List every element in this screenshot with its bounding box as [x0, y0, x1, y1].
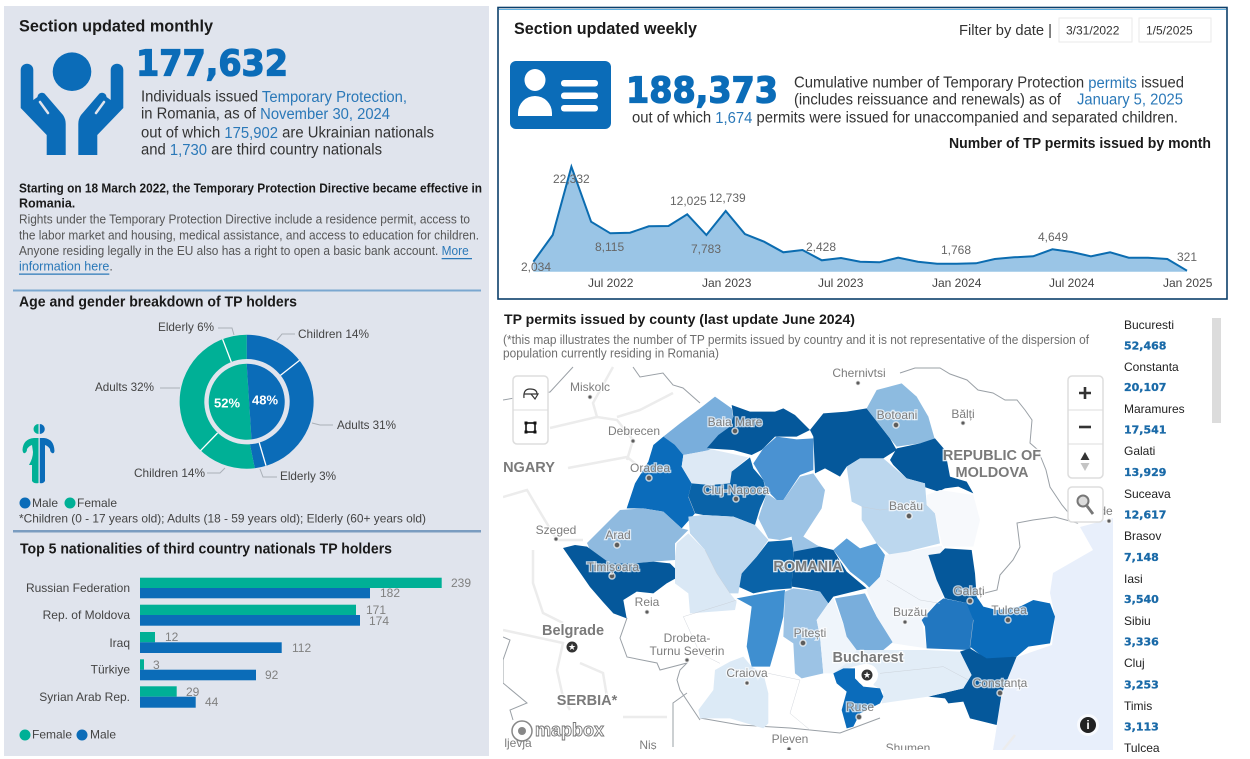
map place labels: Debrecen — [608, 424, 660, 438]
text block: cumulative permits: Cumulative number of Temporary Protection permits issued — [794, 74, 1184, 92]
map place labels: Tulcea — [991, 603, 1027, 617]
map place labels: Chernivtsi — [832, 366, 886, 380]
map place labels: Shumen — [886, 741, 930, 755]
county: Botosani — [867, 383, 935, 447]
chart x axis: Jul 2023 — [818, 276, 864, 290]
county ranking list: Bucuresti — [1124, 318, 1174, 332]
chart x axis: Jul 2024 — [1049, 276, 1095, 290]
map place labels: Pitești — [794, 626, 826, 640]
capital markers: ★ — [863, 670, 871, 680]
donut labels: Children 14% — [134, 466, 205, 480]
county ranking list: 3,336 — [1124, 636, 1159, 648]
row: Rep. of Moldova: 171 — [366, 603, 386, 617]
map place labels: Bucharest — [833, 650, 904, 666]
chart title: permits by month: Number of TP permits issued by month — [949, 135, 1211, 152]
heading: permits by county: TP permits issued by county (last update June 2024) — [504, 311, 855, 327]
chart value labels: 12,025 — [670, 194, 707, 208]
sea — [993, 518, 1113, 750]
text block: directive bold intro: Starting on 18 March 2022, the Temporary Protection Directive became effective in — [19, 182, 482, 196]
county: Ilfov and Giurgiu — [833, 668, 883, 728]
county ranking list — [1124, 318, 1185, 755]
map controls: search — [1068, 487, 1103, 522]
panel: monthly section — [4, 6, 489, 756]
text block: individuals issued temporary protection: out of which 175,902 are Ukrainian nationals — [141, 124, 434, 142]
counties — [563, 383, 1055, 730]
county: Dambovita — [817, 598, 857, 673]
legend: male and female: Male — [32, 496, 58, 510]
map place labels: REPUBLIC OF — [943, 448, 1041, 464]
map place labels: Arad — [605, 528, 631, 542]
heading: section updated weekly: Section updated weekly — [514, 19, 698, 38]
map place labels: Ruse — [846, 700, 874, 714]
row: Syrian Arab Rep. — [39, 685, 219, 709]
county: Alba — [688, 515, 768, 593]
text block: rights under the directive: the labor market and housing, medical assistance, and access to education for children. — [19, 228, 479, 242]
date filter: 3/31/2022 — [1066, 24, 1120, 38]
row: Rep. of Moldova: 174 — [369, 614, 389, 628]
chart value labels: 8,115 — [595, 240, 624, 254]
donut labels — [95, 320, 396, 483]
heading: section updated monthly: Section updated monthly — [19, 16, 214, 36]
county: Salaj — [682, 449, 748, 485]
map note: (*this map illustrates the number of TP permits issued by country and it is not representative of the dispersion of — [503, 333, 1089, 347]
row: Türkiye: Türkiye — [91, 662, 130, 676]
chart value labels — [521, 172, 1197, 274]
county: Galati — [928, 548, 977, 603]
county: Arad — [587, 508, 688, 563]
heading: age and gender breakdown: Age and gender breakdown of TP holders — [19, 294, 297, 310]
map place labels: Niș — [639, 738, 657, 752]
map note — [503, 333, 1089, 360]
county: Brasov — [792, 547, 867, 603]
capital markers: ★ — [568, 642, 576, 652]
county ranking list: 3,253 — [1124, 678, 1159, 692]
county: Bistrita — [753, 437, 813, 500]
text block: cumulative permits: out of which 1,674 permits were issued for unaccompanied and separated children. — [632, 110, 1178, 126]
value: 52 percent: 52% — [214, 396, 240, 410]
map place labels: ljevja — [504, 736, 532, 750]
county ranking list: 3,540 — [1124, 593, 1159, 606]
donut outer female segment — [180, 335, 255, 469]
map place labels: Reia — [635, 595, 660, 609]
icon: hands holding person — [21, 52, 123, 155]
chart x axis: Jan 2024 — [932, 276, 982, 290]
legend: female and male: Female — [32, 728, 72, 742]
county: Mures — [758, 473, 825, 552]
chart value labels: 4,649 — [1038, 230, 1068, 244]
text block: rights under the directive: information here. — [19, 260, 113, 274]
row: Iraq: 112 — [292, 641, 311, 655]
donut inner male half — [247, 364, 285, 439]
map place labels: Szeged — [536, 523, 576, 537]
county ranking list: Constanta — [1124, 360, 1179, 374]
text block: cumulative permits: January 5, 2025 — [1077, 92, 1183, 108]
text block: rights under the directive: Rights under the Temporary Protection Directive include a residence permit, access to — [19, 212, 470, 226]
chart value labels: 12,739 — [709, 191, 746, 205]
county ranking list: Suceava — [1124, 487, 1171, 501]
map place labels: Pleven — [772, 732, 808, 746]
map controls: draw tools — [513, 376, 548, 444]
county ranking list: Timis — [1124, 699, 1152, 713]
donut chart: age and gender — [95, 320, 396, 483]
heading: top 5 nationalities: Top 5 nationalities of third country nationals TP holders — [20, 540, 392, 558]
row: Türkiye — [91, 658, 279, 682]
county: Maramures — [707, 405, 810, 455]
county: Prahova — [835, 593, 893, 650]
text block: directive bold intro — [19, 182, 482, 210]
county ranking list: 17,541 — [1124, 424, 1166, 436]
chart x axis: Jan 2023 — [702, 276, 752, 290]
icon: male and female figure — [22, 424, 54, 483]
chart value labels: 1,768 — [941, 243, 971, 257]
row: Rep. of Moldova — [43, 603, 389, 628]
map place labels: MOLDOVA — [955, 465, 1029, 481]
chart value labels: 22,332 — [553, 172, 590, 186]
map place labels: Galați — [953, 584, 985, 598]
row: Russian Federation: 239 — [451, 576, 471, 590]
donut labels: Children 14% — [298, 327, 369, 341]
icon: map info — [1077, 714, 1099, 736]
county ranking list: Sibiu — [1124, 614, 1151, 628]
county ranking list: 3,113 — [1124, 720, 1159, 734]
county ranking list: 52,468 — [1124, 340, 1166, 352]
donut inner female half — [209, 364, 252, 440]
county: Hunedoara — [675, 533, 737, 613]
text block: rights under the directive: Anyone residing legally in the EU also has a right to open a basic bank account. More — [19, 244, 472, 258]
county: Timis — [563, 545, 682, 618]
bar chart: top 5 nationalities — [26, 576, 471, 709]
value: 48 percent: 48% — [252, 392, 278, 408]
county inner borders — [683, 497, 973, 730]
county ranking list: Galati — [1124, 444, 1155, 458]
county: Sibiu — [738, 540, 793, 593]
row: Russian Federation — [26, 576, 471, 600]
text block: individuals issued temporary protection — [141, 88, 434, 158]
map place labels: Buzău — [893, 605, 927, 619]
row: Rep. of Moldova: Rep. of Moldova — [43, 608, 130, 622]
row: Russian Federation: Russian Federation — [26, 581, 130, 595]
date filter: Filter by date | — [959, 22, 1052, 39]
date filter: 1/5/2025 — [1146, 24, 1193, 38]
map controls: zoom and compass — [1068, 376, 1103, 478]
map place labels: Botoani — [877, 408, 917, 422]
legend: male and female — [20, 496, 117, 510]
big number: 177,632: 177,632 — [136, 44, 288, 84]
chart x axis — [588, 276, 1213, 290]
county ranking list: Brasov — [1124, 529, 1161, 543]
map place labels: Bălți — [951, 407, 975, 421]
map place labels: Miskolc — [570, 380, 610, 394]
text block: individuals issued temporary protection: Individuals issued Temporary Protection, — [141, 88, 407, 106]
county ranking list: 12,617 — [1124, 508, 1166, 522]
row: Syrian Arab Rep.: 44 — [205, 695, 219, 709]
county: Vrancea and Buzau — [867, 546, 945, 648]
county: Vaslui — [927, 490, 942, 515]
donut outer male segment — [247, 335, 314, 468]
map place labels: Timișoara — [587, 560, 639, 574]
row: Türkiye: 92 — [265, 668, 279, 682]
county: Cluj — [688, 457, 767, 525]
map place labels: Drobeta- — [664, 631, 710, 645]
map place labels: Oradea — [630, 461, 670, 475]
county ranking list: Maramures — [1124, 402, 1185, 416]
map: permits by county — [503, 364, 1113, 755]
map place labels: SERBIA* — [557, 693, 618, 709]
legend: male and female: Female — [77, 496, 117, 510]
county ranking list: Iasi — [1124, 572, 1143, 586]
county ranking list: Tulcea — [1124, 741, 1160, 755]
county ranking list: 7,148 — [1124, 551, 1159, 564]
donut labels: Adults 31% — [337, 418, 396, 432]
text block: cumulative permits — [632, 74, 1184, 126]
big number: 188,373: 188,373 — [626, 70, 778, 112]
scrollbar — [1212, 318, 1221, 423]
icon: id card — [510, 61, 611, 129]
map place labels: Bacău — [889, 499, 923, 513]
chart value labels: 2,428 — [806, 240, 836, 254]
county: Suceava — [810, 408, 897, 477]
date filter — [959, 18, 1211, 42]
row: Russian Federation: 182 — [380, 586, 400, 600]
map place labels: NGARY — [503, 460, 555, 476]
row: Syrian Arab Rep.: 29 — [186, 685, 200, 699]
panel: weekly section — [498, 8, 1227, 299]
text block: rights under the directive — [19, 212, 479, 274]
county: Iasi — [890, 438, 973, 493]
donut labels: Adults 32% — [95, 380, 154, 394]
map place labels — [503, 366, 1113, 755]
map place labels: Craiova — [726, 666, 768, 680]
chart x axis: Jan 2025 — [1163, 276, 1213, 290]
map place labels: de — [1099, 504, 1113, 518]
map place labels: Baia Mare — [708, 415, 763, 429]
Bucharest white disc — [858, 664, 878, 684]
county: Arges — [783, 588, 828, 678]
text block: individuals issued temporary protection: in Romania, as of November 30, 2024 — [141, 106, 390, 122]
row: Iraq: Iraq — [109, 636, 130, 650]
icon: map info: i — [1086, 718, 1090, 732]
text block: cumulative permits: (includes reissuance and renewals) as of — [794, 92, 1062, 108]
text block: directive bold intro: Romania. — [19, 196, 75, 210]
map place labels: ROMANIA — [773, 559, 843, 575]
donut labels: Elderly 3% — [280, 469, 336, 483]
chart value labels: 7,783 — [691, 242, 721, 256]
county: Neamt and Bacau — [847, 458, 940, 557]
county: Tulcea — [967, 597, 1055, 660]
county: Braila — [922, 598, 973, 650]
text block: individuals issued temporary protection: and 1,730 are third country nationals — [141, 142, 382, 158]
map place labels: Belgrade — [542, 623, 604, 639]
row: Iraq — [109, 630, 311, 655]
county: Constanta — [928, 648, 1017, 725]
legend: female and male — [20, 728, 116, 742]
county: Covasna — [833, 538, 885, 590]
chart x axis: Jul 2022 — [588, 276, 634, 290]
city markers — [554, 381, 1111, 751]
row: Syrian Arab Rep.: Syrian Arab Rep. — [39, 690, 130, 704]
county ranking list: 20,107 — [1124, 381, 1166, 394]
row: Iraq: 12 — [165, 630, 179, 644]
map place labels: Cluj-Napoca — [703, 483, 769, 497]
county: Ialomita and Calarasi — [833, 650, 972, 703]
capital markers — [566, 642, 872, 680]
row: Türkiye: 3 — [153, 658, 160, 672]
chart value labels: 2,034 — [521, 260, 551, 274]
county ranking list: Cluj — [1124, 656, 1145, 670]
county: Dolj — [698, 657, 768, 728]
map place labels: Turnu Severin — [650, 644, 724, 658]
footnote: age groups: *Children (0 - 17 years old); Adults (18 - 59 years old); Elderly (60+ years old) — [19, 512, 426, 526]
chart value labels: 321 — [1177, 250, 1197, 264]
mapbox logo: mapbox — [535, 720, 604, 740]
map place labels: Constanța — [973, 676, 1028, 690]
county: Valcea — [737, 590, 785, 667]
county: Satu Mare — [663, 397, 733, 455]
donut labels: Elderly 6% — [158, 320, 214, 334]
legend: female and male: Male — [90, 728, 116, 742]
county ranking list: 13,929 — [1124, 466, 1166, 479]
area chart: permits by month — [521, 167, 1213, 290]
map note: population currently residing in Romania) — [503, 346, 719, 360]
county: Bihor — [627, 437, 695, 528]
